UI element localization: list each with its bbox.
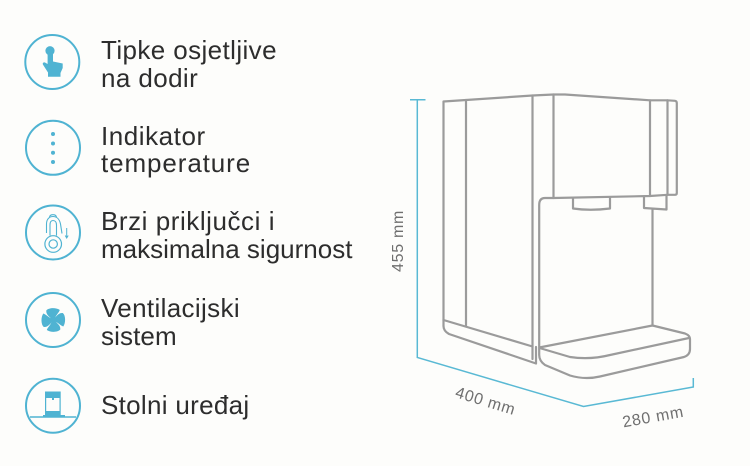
feature text: touch keys: na dodir [101, 63, 198, 93]
icon: quick connector [26, 206, 80, 260]
dimension label: depth: 280 mm [621, 404, 685, 431]
dimension label: width: 400 mm [453, 385, 517, 419]
feature text: quick connectors [101, 206, 352, 264]
feature text: ventilation [101, 293, 240, 351]
icon: temperature dots [26, 121, 80, 175]
icon: countertop device [26, 379, 80, 433]
feature text: quick connectors: maksimalna sigurnost [101, 234, 352, 264]
feature text: quick connectors: Brzi priključci i [101, 206, 275, 236]
feature text: ventilation: Ventilacijski [101, 293, 240, 323]
dimension lines [410, 100, 693, 407]
feature text: temperature indicator [101, 121, 251, 178]
dimension label: height: 455 mm [390, 210, 407, 272]
icon: touch hand [25, 35, 79, 89]
feature text: temperature indicator: Indikator [101, 121, 206, 151]
feature text: ventilation: sistem [101, 321, 177, 351]
feature text: touch keys: Tipke osjetljive [101, 35, 277, 65]
feature text: touch keys [101, 35, 277, 93]
feature text: temperature indicator: temperature [101, 148, 251, 178]
feature text: countertop device: Stolni uređaj [101, 390, 249, 420]
icon: ventilation fan [26, 293, 80, 347]
water dispenser outline [444, 94, 690, 378]
